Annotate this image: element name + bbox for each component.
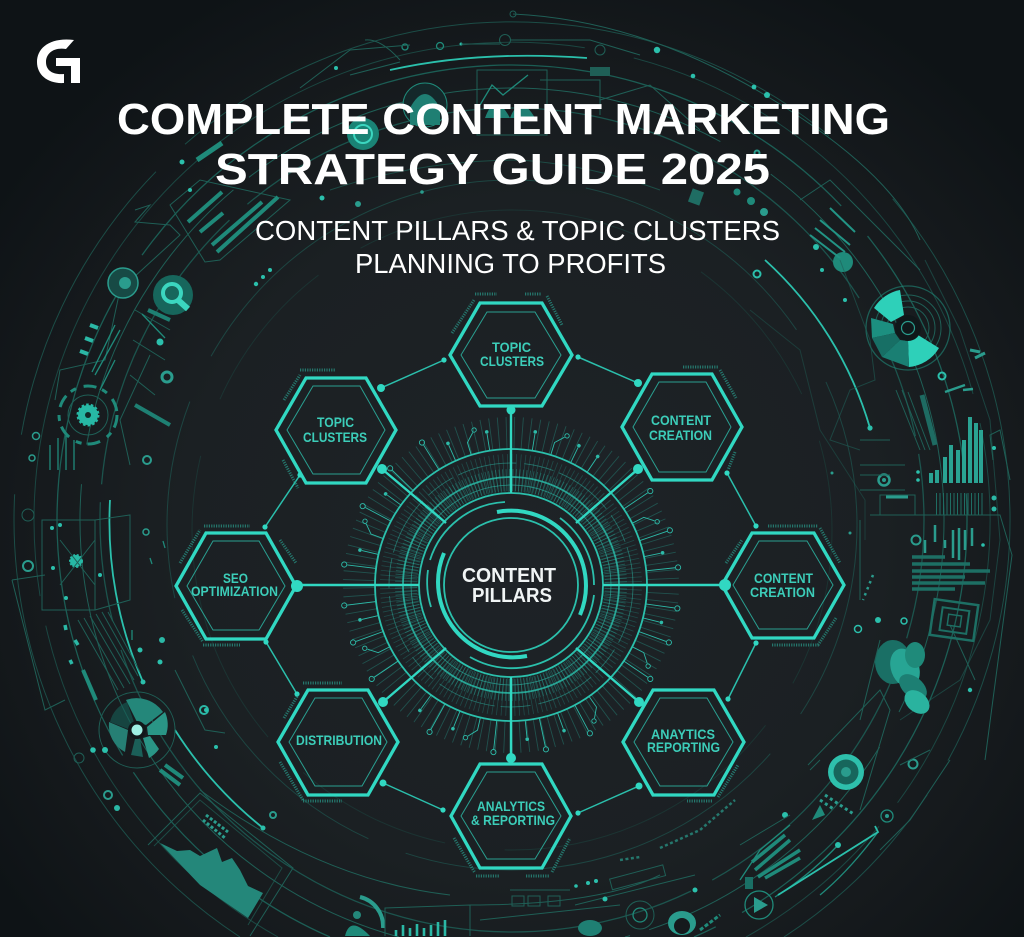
hexagon: anaytics reporting (lower right): REPORTING: [647, 739, 720, 755]
hexagon: seo optimization (left): [176, 526, 296, 645]
dashboard: lower right bars and play icon: [740, 760, 878, 919]
hexagon: distribution (lower left): DISTRIBUTION: [296, 732, 382, 748]
title: STRATEGY GUIDE 2025: [215, 145, 770, 194]
title: COMPLETE CONTENT MARKETING: [117, 95, 890, 144]
hexagon: content creation (right): [722, 526, 844, 645]
hexagon: seo optimization (left): SEO: [223, 570, 248, 586]
icon: globe badge: [108, 268, 138, 298]
hexagon: seo optimization (left): OPTIMIZATION: [191, 583, 278, 599]
dashboard: left column panels: [12, 436, 225, 733]
hexagon: topic clusters (upper left): [276, 370, 396, 488]
subtitle: [255, 215, 780, 279]
hexagon connector lines: [262, 354, 759, 816]
center hub: main rings: [375, 449, 647, 721]
hexagon: content creation (upper right): CREATION: [649, 427, 712, 443]
icon: target circle: [808, 690, 950, 850]
logo: [37, 40, 80, 83]
icon: magnifier: [153, 275, 193, 315]
dashboard: top strip widgets: [300, 34, 819, 250]
hexagon: content creation (right): CREATION: [750, 584, 815, 600]
center hub: radial circuit rings: [341, 427, 681, 755]
hexagon: anaytics reporting (lower right): [623, 690, 744, 801]
hexagon: content creation (upper right): CONTENT: [651, 412, 711, 428]
dashboard: bottom widgets: [200, 790, 790, 936]
icon: right blob illustration: [854, 617, 975, 720]
subtitle: PLANNING TO PROFITS: [355, 248, 666, 279]
hub spokes to hexagons: [291, 406, 731, 763]
hexagon: analytics and reporting (bottom): ANALYTICS: [477, 798, 545, 814]
hexagon: content creation (upper right): [622, 367, 742, 480]
center label: content pillars: PILLARS: [472, 585, 552, 607]
icon: left pie chart: [74, 692, 175, 768]
dashboard: area chart: [104, 708, 293, 936]
icon: gear dial: [29, 386, 117, 461]
dashboard: top left bars: [170, 143, 324, 286]
icon: right pie chart: [754, 180, 985, 392]
subtitle: CONTENT PILLARS & TOPIC CLUSTERS: [255, 215, 780, 246]
hexagon: analytics and reporting (bottom): [451, 764, 571, 876]
center label: content pillars: [462, 565, 556, 607]
dashboard: left stripes: [80, 310, 172, 465]
hexagon: topic clusters (upper left): CLUSTERS: [303, 429, 367, 445]
title: [117, 95, 890, 194]
hexagon: topic clusters (upper left): TOPIC: [317, 414, 354, 430]
center label: content pillars: CONTENT: [462, 565, 556, 587]
hexagon: topic clusters (top): CLUSTERS: [480, 353, 544, 369]
center hub: outer node spokes: [341, 427, 681, 755]
dashboard: right bar chart: [750, 260, 1012, 760]
hexagon: topic clusters (top): [450, 294, 572, 406]
hexagon: analytics and reporting (bottom): & REPORTING: [471, 812, 555, 828]
hexagon: content creation (right): CONTENT: [754, 570, 813, 586]
hexagon: topic clusters (top): TOPIC: [492, 339, 531, 355]
hexagon: anaytics reporting (lower right): ANAYTICS: [651, 726, 715, 742]
hexagon: distribution (lower left): [278, 683, 398, 801]
